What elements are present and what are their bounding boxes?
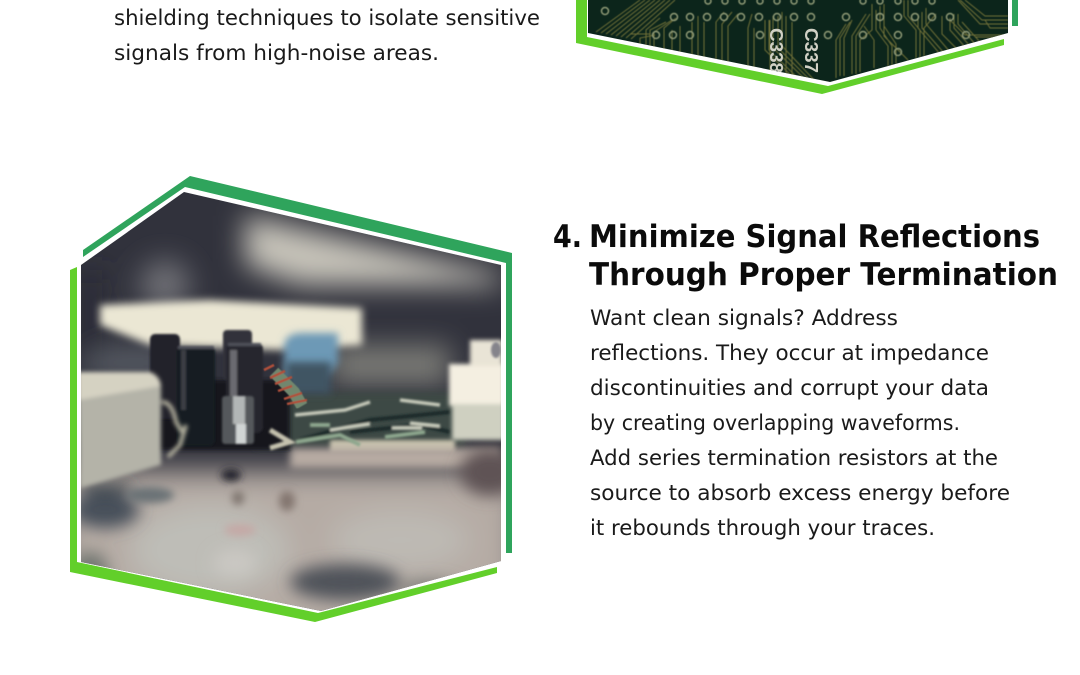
text block: step 3 closing lines	[114, 6, 540, 65]
text block: step 4 description: reflections. They occur at impedance	[590, 341, 989, 365]
cream bar	[100, 300, 362, 350]
text block: step 3 closing lines: shielding techniques to isolate sensitive	[114, 6, 540, 30]
text block: step 4 description: by creating overlapping waveforms.	[590, 411, 960, 435]
lower board	[81, 452, 501, 611]
heading: step 4: Through Proper Termination	[589, 257, 1058, 293]
connector pin grey	[491, 342, 501, 358]
panel: circuit board photo with hexagon frame	[576, 0, 1018, 94]
silver component	[222, 396, 254, 444]
heading: step 4: Minimize Signal Reflections	[589, 219, 1040, 255]
text block: step 4 description	[590, 306, 1010, 540]
text block: step 4 description: discontinuities and corrupt your data	[590, 376, 989, 400]
heading: step 4	[553, 219, 1058, 293]
text block: step 3 closing lines: signals from high-noise areas.	[114, 41, 439, 65]
frame: light green lower border	[70, 267, 497, 622]
panel: electronics photo with hexagon frame	[60, 176, 520, 640]
coil	[264, 365, 307, 406]
frame: dark green upper border	[83, 176, 512, 553]
text block: step 4 description: it rebounds through your traces.	[590, 516, 935, 540]
text block: step 4 description: Add series termination resistors at the	[590, 446, 998, 470]
label: C337: C337	[801, 28, 821, 73]
left connector block	[78, 372, 186, 488]
text block: step 4 description: Want clean signals? Address	[590, 306, 898, 330]
frame: dark green right border	[1012, 0, 1018, 26]
board band behind components	[289, 394, 464, 446]
photo: blurred circuit board components	[81, 192, 501, 611]
capacitors	[150, 330, 263, 446]
blue capacitor	[284, 333, 338, 385]
white connector right	[449, 340, 504, 440]
label: C338: C338	[766, 28, 786, 73]
background highlight	[81, 215, 500, 385]
heading: step 4: 4.	[553, 219, 582, 255]
frame: light green lower border	[576, 0, 1004, 94]
text block: step 4 description: source to absorb excess energy before	[590, 481, 1010, 505]
circuit traces on board	[270, 400, 450, 448]
photo: printed circuit board traces	[588, 0, 1008, 90]
dark area behind components	[155, 380, 290, 450]
